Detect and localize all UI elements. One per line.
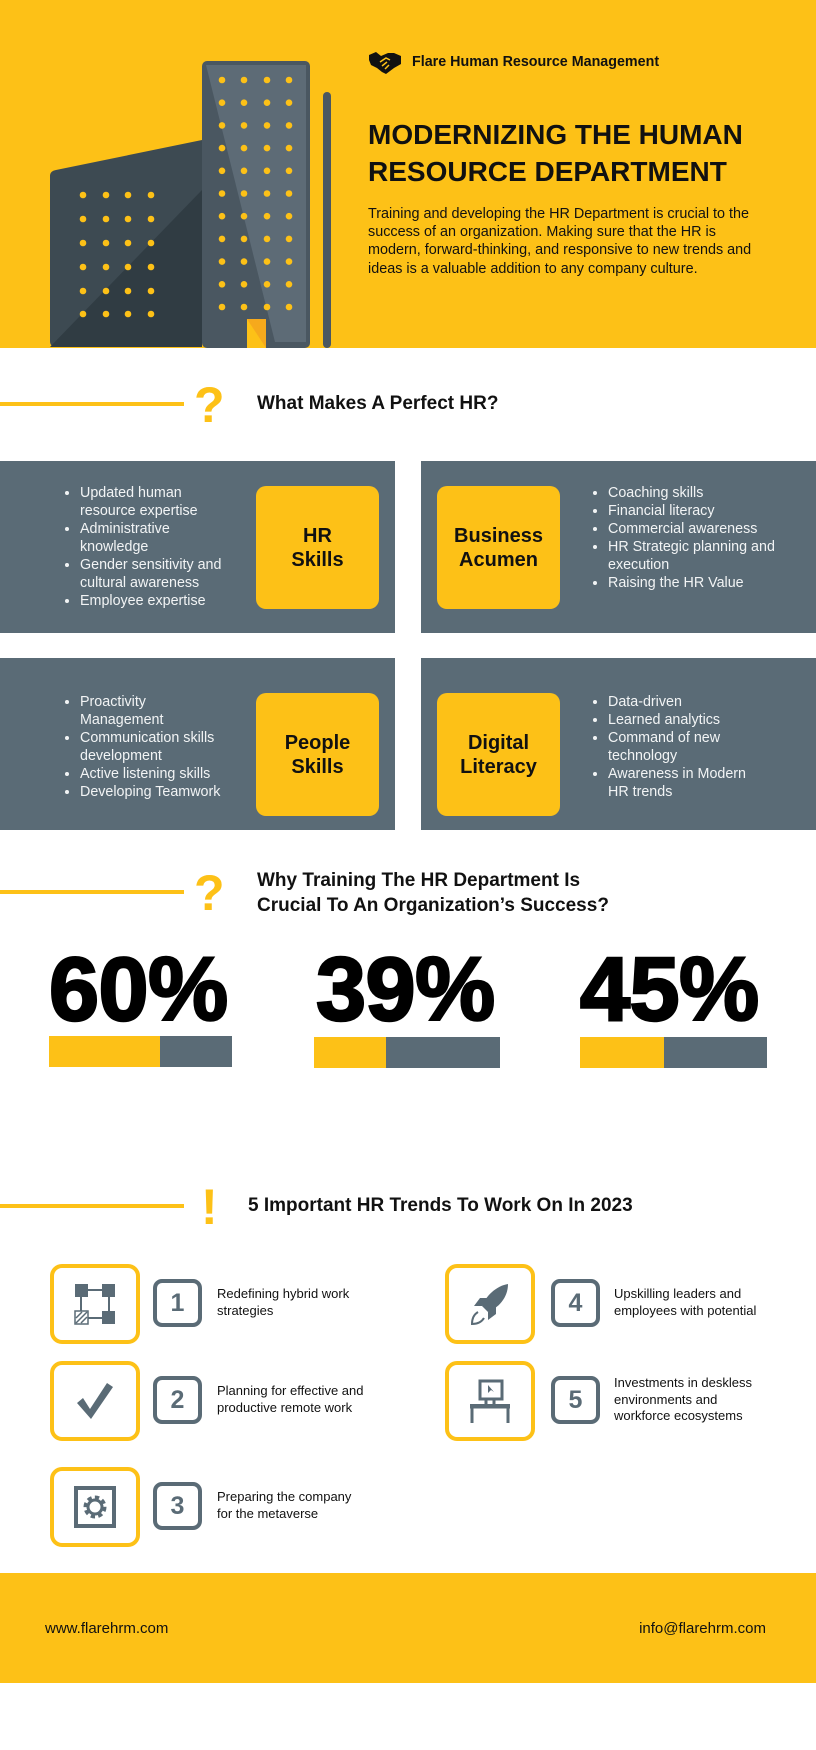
panel: digital literacy: Command of new technology — [608, 730, 720, 764]
trend 5: 5 — [569, 1386, 582, 1414]
trend 1: 1 — [171, 1288, 184, 1316]
section heading 2 — [0, 865, 609, 921]
panel: HR skills: Updated human resource expertise — [80, 485, 198, 519]
section heading 2: ? — [194, 865, 225, 921]
panel: HR skills: Skills — [291, 548, 344, 570]
trend 1 — [50, 1264, 350, 1344]
trend 3: Preparing the company — [217, 1489, 351, 1504]
stat 60%: 60% — [49, 940, 228, 1040]
trend 1: Redefining hybrid work — [217, 1286, 349, 1301]
panel: business acumen: Coaching skills — [608, 485, 703, 501]
trend 5 — [445, 1361, 752, 1441]
section heading 1 — [0, 377, 498, 433]
panel: business acumen: Commercial awareness — [608, 521, 757, 537]
panel: digital literacy: Learned analytics — [608, 712, 720, 728]
panel: people skills: Developing Teamwork — [80, 784, 220, 800]
section heading 2: Crucial To An Organization’s Success? — [257, 895, 609, 916]
trend 5: Investments in deskless — [614, 1375, 752, 1390]
panel: people skills: Skills — [291, 756, 344, 778]
stat 39%: 39% — [316, 940, 495, 1040]
trend 2: productive remote work — [217, 1400, 352, 1414]
icon: handshake — [369, 52, 401, 74]
panel: digital literacy: Data-driven — [608, 694, 682, 710]
section heading 1: ? — [194, 377, 225, 433]
trend 3 — [50, 1467, 352, 1547]
panel: business acumen: Raising the HR Value — [608, 575, 744, 591]
section heading 2: Why Training The HR Department Is — [257, 870, 580, 891]
panel: HR skills: Administrative knowledge — [80, 521, 170, 555]
section heading 3 — [0, 1179, 633, 1235]
panel: HR skills — [0, 461, 395, 633]
footer — [0, 1573, 816, 1683]
trend 4: 4 — [569, 1288, 582, 1316]
panel: business acumen: HR Strategic planning and execution — [608, 539, 775, 573]
panel: business acumen: Acumen — [459, 548, 538, 570]
trend 2: 2 — [171, 1386, 184, 1414]
panel: business acumen: Financial literacy — [608, 503, 714, 519]
panel: people skills: People — [285, 732, 350, 754]
panel: people skills — [0, 658, 395, 830]
panel: HR skills: HR — [303, 524, 332, 546]
trend 5: workforce ecosystems — [614, 1408, 743, 1423]
brand name: Flare Human Resource Management — [412, 54, 659, 70]
panel: digital literacy: Digital — [468, 732, 529, 754]
section heading 3: 5 Important HR Trends To Work On In 2023 — [248, 1195, 633, 1216]
panel: business acumen: Business — [454, 524, 543, 546]
logo — [369, 52, 659, 74]
panel: HR skills: Employee expertise — [80, 593, 206, 609]
panel: digital literacy — [421, 658, 816, 830]
panel: people skills: Active listening skills — [80, 766, 210, 782]
trend 4: Upskilling leaders and — [614, 1286, 741, 1301]
trend 3: for the metaverse — [217, 1506, 318, 1520]
panel: people skills: Communication skills development — [80, 730, 214, 764]
stat 45%: 45% — [580, 940, 759, 1040]
section heading 3: ! — [201, 1179, 218, 1235]
header background — [0, 0, 816, 348]
intro paragraph: Training and developing the HR Department is crucial to the success of an organization. Making sure that the HR is modern, forward-thinking, and responsive to new trends and ideas is a valuable addition to any company culture. — [368, 206, 751, 277]
trend 4 — [445, 1264, 756, 1344]
trend 2: Planning for effective and — [217, 1383, 363, 1398]
section heading 1: What Makes A Perfect HR? — [257, 393, 498, 414]
title: MODERNIZING THE HUMAN RESOURCE DEPARTMENT — [368, 119, 743, 187]
panel: digital literacy: Literacy — [460, 756, 537, 778]
panel: HR skills: Gender sensitivity and cultural awareness — [80, 557, 221, 591]
panel: digital literacy: Awareness in Modern HR trends — [608, 766, 746, 800]
trend 4: employees with potential — [614, 1302, 756, 1318]
footer: email: info@flarehrm.com — [639, 1620, 766, 1637]
trend 1: strategies — [217, 1302, 273, 1318]
trend 3: 3 — [171, 1492, 184, 1520]
panel: business acumen — [421, 461, 816, 633]
trend 2 — [50, 1361, 363, 1441]
panel: people skills: Proactivity Management — [80, 694, 163, 728]
footer: website: www.flarehrm.com — [45, 1620, 168, 1637]
trend 5: environments and — [614, 1392, 717, 1406]
illustration: buildings — [50, 61, 331, 348]
